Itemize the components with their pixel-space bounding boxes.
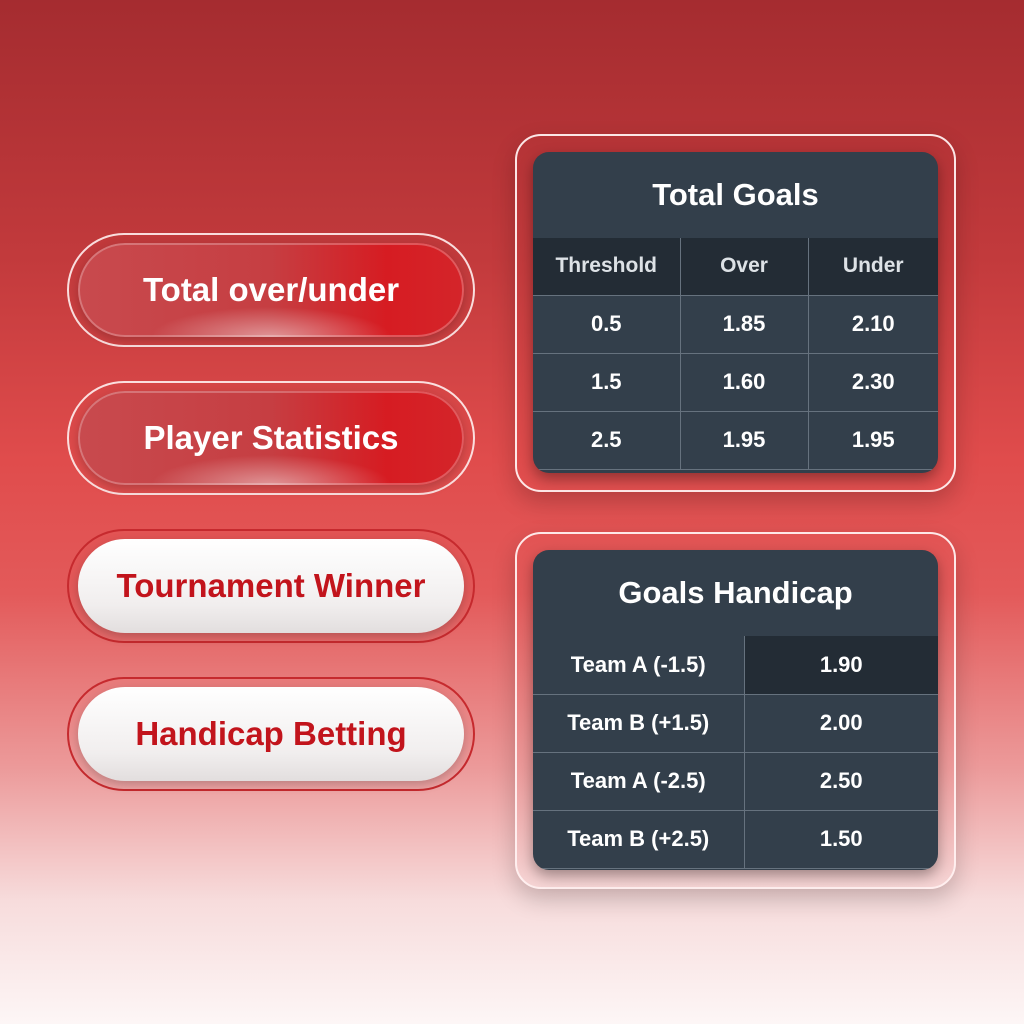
table: handicap odds: 2.50 (820, 768, 863, 793)
table: thresholds: 1.85 (723, 311, 765, 336)
table: handicap odds: Team A (-1.5) (571, 652, 706, 677)
table: thresholds: 1.60 (723, 369, 765, 394)
heading: Goals Handicap: Goals Handicap (618, 575, 853, 610)
table: thresholds: 1.95 (723, 427, 765, 452)
button: Total over/under: Total over/under (143, 271, 399, 308)
table: handicap odds: Team B (+1.5) (567, 710, 709, 735)
table: thresholds: 1.95 (852, 427, 895, 452)
table: handicap odds: Team A (-2.5) (571, 768, 706, 793)
table: thresholds: 2.5 (591, 427, 622, 452)
button: Handicap Betting (67, 677, 475, 791)
table: thresholds: 2.10 (852, 311, 895, 336)
button: Total over/under (67, 233, 475, 347)
table: thresholds: 1.5 (591, 369, 622, 394)
table: handicap odds: 1.50 (820, 826, 863, 851)
table: handicap odds: 2.00 (820, 710, 863, 735)
button: Player Statistics (67, 381, 475, 495)
button: Tournament Winner: Tournament Winner (117, 567, 425, 604)
table: thresholds (533, 238, 938, 470)
table: thresholds: Threshold (555, 254, 657, 277)
button: Handicap Betting: Handicap Betting (135, 715, 407, 752)
panel: Total Goals table (515, 134, 956, 492)
button: Tournament Winner (67, 529, 475, 643)
button: Player Statistics: Player Statistics (144, 419, 398, 456)
table: thresholds: Under (843, 254, 904, 277)
heading: Total Goals: Total Goals (652, 177, 819, 212)
table: handicap odds: Team B (+2.5) (567, 826, 709, 851)
table: handicap odds: 1.90 (820, 652, 863, 677)
table: thresholds: 0.5 (591, 311, 622, 336)
panel: Goals Handicap table (515, 532, 956, 889)
table: thresholds: 2.30 (852, 369, 895, 394)
table: thresholds: Over (720, 254, 768, 277)
table: handicap odds (533, 636, 938, 869)
